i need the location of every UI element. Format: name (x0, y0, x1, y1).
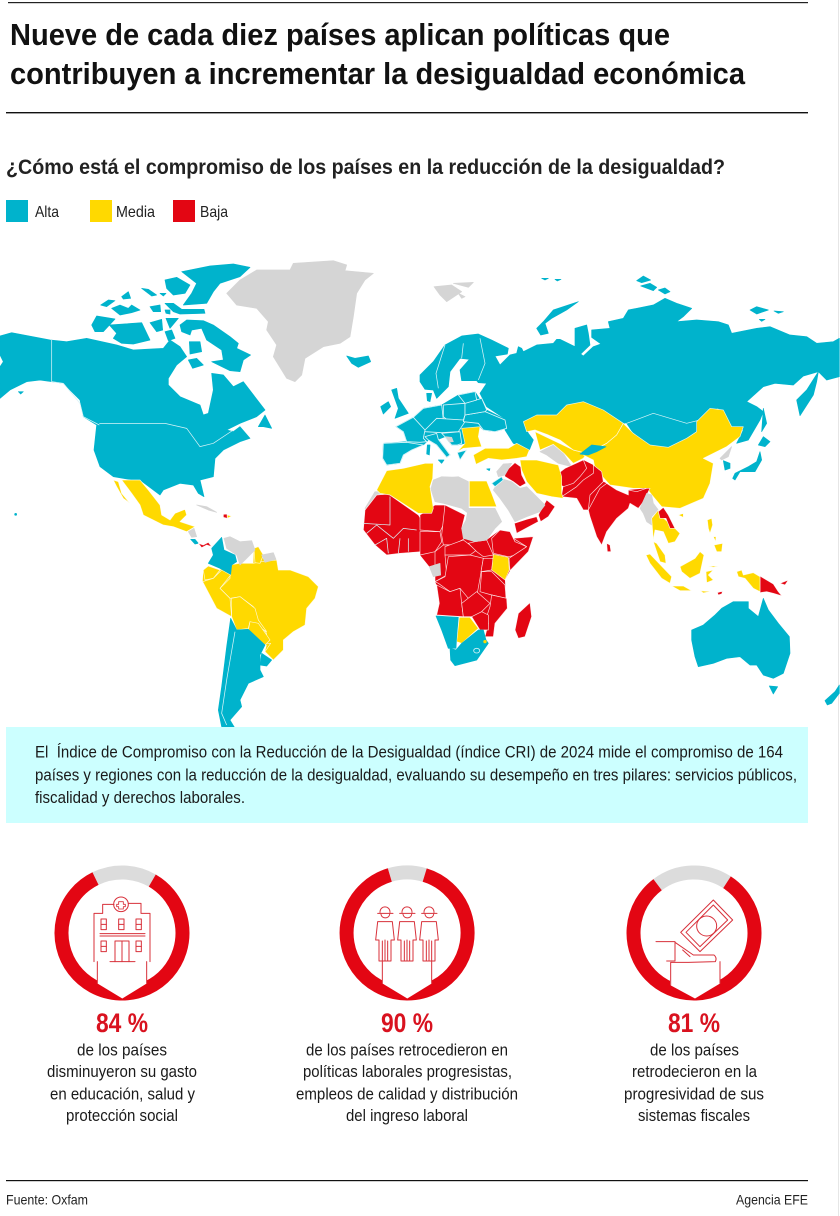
description (624, 1040, 764, 1125)
description: progresividad de sus (624, 1084, 764, 1104)
description (296, 1040, 518, 1125)
donut chart: 81 % (634, 873, 755, 998)
agency credit: Agencia EFE (736, 1192, 808, 1208)
description: políticas laborales progresistas, (303, 1062, 512, 1081)
icon: hand with banknote (656, 900, 733, 985)
stat column: 81 % (624, 873, 764, 1125)
donut chart: 84 % (61, 872, 182, 998)
description: de los países (77, 1040, 167, 1060)
description: protección social (66, 1106, 178, 1125)
legend item: Baja: Baja (200, 204, 228, 221)
description: de los países (650, 1040, 739, 1060)
icon: workers (376, 907, 438, 983)
map region: Africa, Middle East, South and South-East Asia, Oceania (420, 460, 839, 705)
info box: fiscalidad y derechos laborales. (35, 788, 245, 807)
source credit: Fuente: Oxfam (6, 1192, 88, 1208)
description: del ingreso laboral (346, 1106, 468, 1125)
map region: Russia, Scandinavia, Central and East Asia (420, 276, 839, 508)
legend item: Alta: Alta (35, 204, 59, 221)
legend item: Alta (6, 200, 59, 222)
description: empleos de calidad y distribución (296, 1084, 518, 1104)
stat column: 90 % (296, 872, 518, 1125)
title: contribuyen a incrementar la desigualdad económica (10, 56, 746, 91)
title: Nueve de cada diez países aplican políticas que (10, 17, 670, 52)
value: 90 %: 90 % (381, 1008, 433, 1038)
map region: Europe, Mediterranean and North Africa (377, 388, 529, 513)
map region: Mexico, Central America, South America, West Africa (14, 480, 422, 728)
subtitle question: ¿Cómo está el compromiso de los países en la reducción de la desigualdad? (6, 156, 725, 179)
donut chart: 90 % (347, 872, 468, 998)
value: 84 %: 84 % (96, 1008, 148, 1038)
legend (6, 200, 228, 222)
description: disminuyeron su gasto (47, 1062, 197, 1081)
description (47, 1040, 197, 1125)
legend item: Media: Media (116, 204, 155, 221)
description: retrodecieron en la (632, 1062, 757, 1081)
value: 81 %: 81 % (668, 1008, 720, 1038)
info box (6, 727, 808, 823)
stat column: 84 % (47, 872, 197, 1125)
description: sistemas fiscales (638, 1106, 750, 1125)
legend item: Baja (173, 200, 228, 222)
description: de los países retrocedieron en (306, 1040, 508, 1060)
map region: North America, Greenland, Iceland (0, 261, 373, 497)
legend item: Media (90, 200, 155, 222)
description: en educación, salud y (50, 1084, 195, 1104)
world map (0, 261, 839, 728)
icon: hospital (94, 897, 150, 983)
title (10, 17, 746, 91)
